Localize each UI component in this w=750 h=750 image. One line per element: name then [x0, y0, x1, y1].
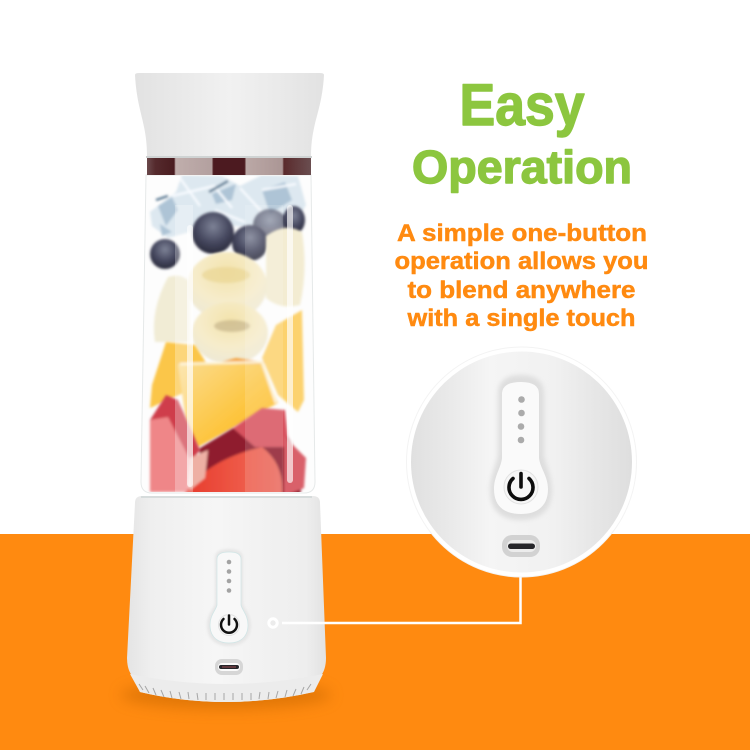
white panel: [494, 382, 548, 514]
description text: [394, 220, 648, 332]
translucent glass facets: [175, 205, 193, 493]
banana slices: [154, 228, 305, 364]
indicator dots: [518, 396, 525, 443]
icon: power button: [218, 614, 240, 636]
cap: [135, 73, 324, 157]
connector line: [282, 570, 520, 623]
description text: A simple one-button: [397, 220, 647, 247]
dark seal band: [147, 158, 311, 175]
icon: power symbol: [504, 470, 538, 504]
control panel: [207, 549, 251, 675]
base: [127, 496, 326, 702]
orange pieces: [150, 310, 304, 447]
ice: [150, 175, 306, 238]
icon: USB-C port close-up: [502, 535, 540, 557]
icon: USB-C port: [215, 659, 243, 675]
description text: to blend anywhere: [408, 277, 636, 304]
connector dot: [269, 619, 277, 627]
strawberries: [150, 395, 306, 496]
vents: [139, 684, 311, 700]
title: [412, 73, 632, 193]
blender shadow: [121, 681, 331, 709]
panel recess: [490, 375, 552, 520]
title: Operation: [412, 141, 632, 193]
title: Easy: [460, 73, 584, 138]
orange background band: [0, 534, 750, 750]
battery indicator dots: [227, 560, 231, 593]
description text: operation allows you: [394, 248, 648, 275]
zoom circle: power button close-up: [406, 347, 636, 577]
description text: with a single touch: [406, 305, 636, 332]
glass ribs: [187, 225, 193, 487]
blueberries: [150, 206, 305, 269]
glass jar with fruit: [141, 175, 315, 496]
blender product: [121, 73, 331, 709]
